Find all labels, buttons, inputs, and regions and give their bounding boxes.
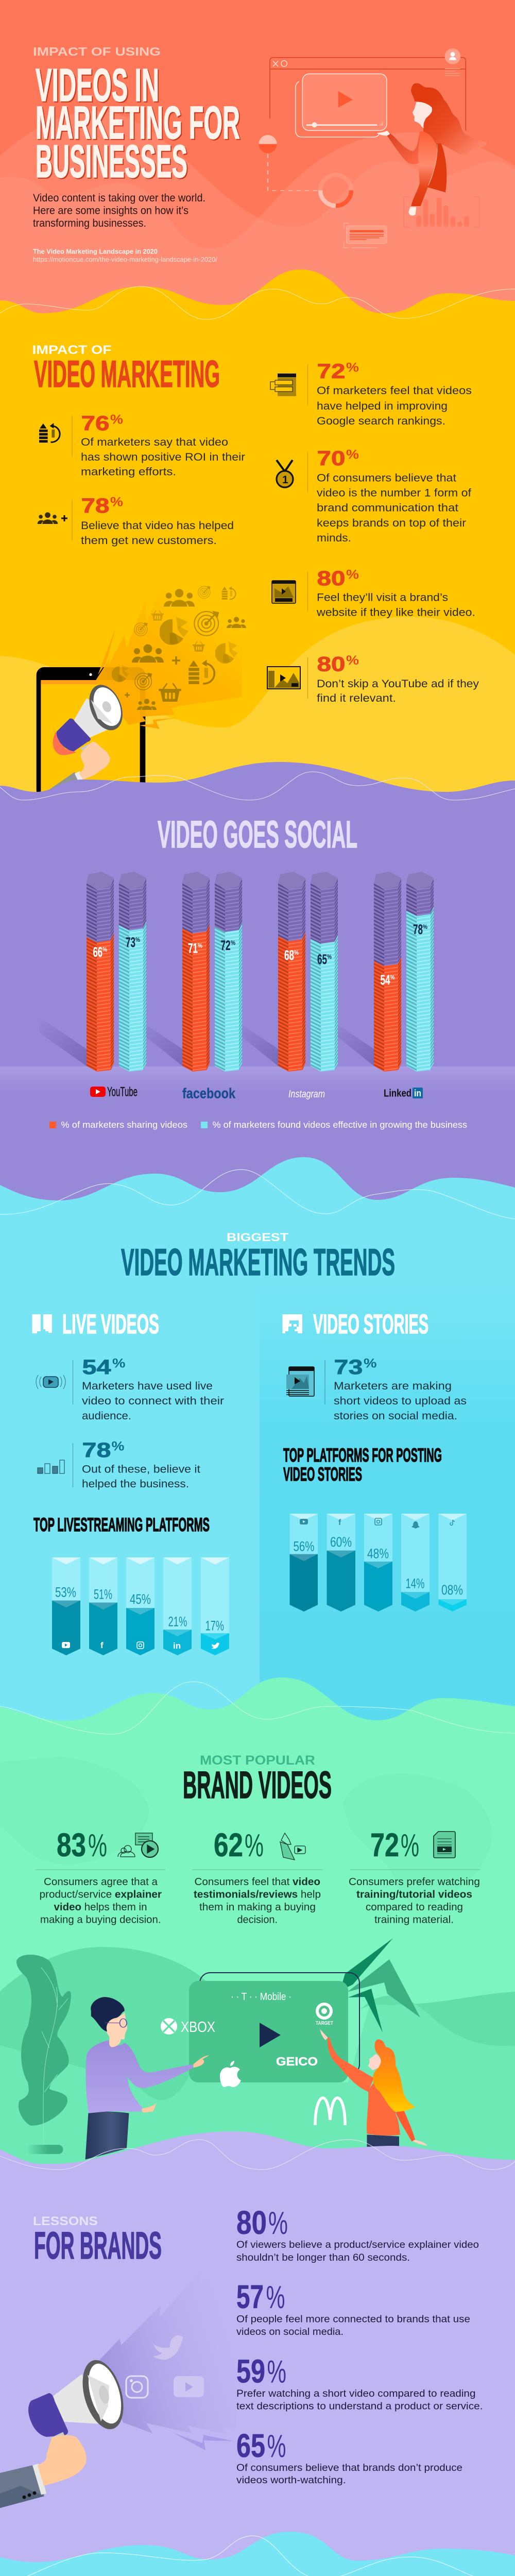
stat: 62% testimonials: testimonials/reviews help (194, 1889, 321, 1900)
bar: Facebook sharing 71%: % (198, 942, 202, 949)
stat: 70%: minds. (317, 532, 351, 544)
stat: 72% tutorials: training/tutorial videos (356, 1889, 472, 1900)
icon: testimonial book (280, 1833, 305, 1860)
bar: Facebook 60%: f (338, 1518, 341, 1527)
bar: LinkedIn effective 78%: 78 (413, 922, 423, 937)
stat: 70%: Of consumers believe that (317, 472, 456, 484)
lightning bolt (174, 2433, 233, 2450)
title: BUSINESSES (37, 137, 188, 189)
stat: 80% visit website: Feel they’ll visit a brand’s (317, 591, 448, 604)
yellow wave background (0, 269, 515, 824)
bar: LinkedIn 21%: 21% (168, 1614, 187, 1629)
chart heading: top livestreaming platforms: TOP LIVESTREAMING PLATFORMS (33, 1514, 210, 1535)
stat: 78%: 78 (82, 1439, 111, 1462)
bar: YouTube sharing 66%: % (102, 946, 107, 953)
heading: FOR BRANDS (34, 2224, 162, 2267)
stat: 83% explainer: product/service explainer (39, 1889, 162, 1900)
panel: impact of video marketing (0, 269, 515, 824)
legend: % of marketers sharing videos (61, 1120, 187, 1130)
stat: 73%: 73 (334, 1356, 363, 1379)
logo: Target (316, 2004, 333, 2026)
text document card (344, 223, 387, 248)
video player card (296, 74, 387, 137)
stat: 57% (236, 2278, 470, 2337)
bar: Instagram sharing 68%: 68 (284, 947, 294, 963)
stat: 62% testimonials: decision. (237, 1914, 278, 1926)
stat: 76%: % (110, 412, 123, 427)
bar: YouTube 56% (289, 1514, 318, 1612)
icon: number one medal (277, 460, 293, 487)
bar: Instagram 48% (364, 1514, 392, 1612)
stat: 78%: 78 (81, 495, 109, 517)
bar: YouTube effective 73%: 73 (126, 935, 135, 950)
title: VIDEOS IN (37, 61, 160, 112)
stat: 80% visit website: 80 (317, 567, 345, 590)
logo: Xbox: XBOX (181, 2019, 215, 2036)
icon: instagram (126, 2376, 148, 2398)
title (36, 60, 241, 189)
bar: Instagram sharing 68% (278, 872, 305, 1072)
legend: % of marketers found videos effective in growing the business (212, 1120, 467, 1130)
stat: 73%: % (364, 1356, 377, 1370)
stat: 73%: stories on social media. (334, 1410, 457, 1422)
bar: YouTube sharing 66% (87, 872, 114, 1072)
stat: 72% tutorials: 72 (370, 1826, 399, 1863)
bar: YouTube 56%: 56% (294, 1538, 314, 1554)
stat: 78%: Believe that video has helped (81, 519, 234, 532)
stat: 80% visit website (272, 567, 475, 618)
bar: Instagram effective 65% (311, 872, 338, 1072)
heading (32, 343, 220, 395)
logo: YouTube: YouTube (107, 1085, 138, 1099)
column: video stories (282, 1309, 467, 1612)
stat: 76%: Of marketers say that video (81, 436, 228, 448)
stat: 72%: Google search rankings. (317, 415, 445, 427)
stat: 72% tutorials: % (401, 1828, 419, 1863)
bar: YouTube effective 73% (119, 872, 146, 1072)
green wave background (0, 1677, 515, 2190)
bar: Facebook 60% (327, 1514, 355, 1612)
icon: tutorial document (434, 1832, 455, 1858)
logo: Apple (220, 2061, 241, 2087)
stat: 65% (236, 2427, 462, 2486)
intro paragraph: transforming businesses. (33, 217, 146, 229)
stat: 57%: 57 (236, 2278, 264, 2315)
logo: Geico: GEICO (276, 2055, 318, 2068)
floor band (0, 1066, 515, 1092)
stat: 80% visit website: website if they like their video. (316, 606, 475, 618)
stat: 54%: % (112, 1356, 126, 1370)
icon: dollar return (39, 423, 60, 443)
lightning bolts (98, 626, 178, 729)
donut chart (320, 175, 351, 206)
logo: Instagram: Instagram (288, 1089, 325, 1100)
heading: BRAND VIDEOS (183, 1764, 332, 1806)
stat: 70%: keeps brands on top of their (317, 517, 466, 529)
subheading: live videos (32, 1309, 159, 1340)
lilac wave background (0, 2131, 515, 2576)
megaphone and hand (46, 680, 129, 792)
stat: 70%: video is the number 1 form of (317, 486, 471, 499)
stat: 59%: text descriptions to understand a product or service. (236, 2401, 483, 2412)
plant (16, 1955, 71, 2154)
stat: 72% tutorials: Consumers prefer watching (349, 1876, 480, 1888)
icon: story window (286, 1367, 314, 1396)
megaphone and hand (0, 2355, 131, 2508)
chart: top livestreaming platforms (52, 1557, 229, 1655)
source reference: https://motioncue.com/the-video-marketing-landscape-in-2020/ (33, 256, 217, 263)
stat: 78%: % (111, 1439, 125, 1454)
hero background (0, 0, 515, 330)
bar: Facebook effective 72%: 72 (220, 938, 231, 953)
stat: 59% (236, 2352, 483, 2412)
chart: top platforms for video stories (289, 1514, 467, 1612)
stat: 78%: helped the business. (82, 1478, 189, 1490)
intro paragraph: Video content is taking over the world. (33, 192, 205, 204)
logo: facebook: facebook (182, 1085, 235, 1101)
bar: Instagram 45%: 45% (130, 1591, 151, 1607)
panel: future outlook background (0, 2532, 515, 2576)
icon: skip ad video (267, 667, 300, 689)
stat: 76%: has shown positive ROI in their (81, 451, 245, 463)
hero illustration (259, 48, 487, 248)
stat: 76% (39, 412, 245, 478)
stat: 57%: % (266, 2280, 285, 2315)
bar: Snapchat 14% (401, 1514, 430, 1612)
bar: TikTok 08% (439, 1514, 467, 1612)
bar: Facebook 51% (89, 1557, 117, 1655)
stat: 65%: % (267, 2429, 286, 2464)
stat: 78% (38, 1439, 200, 1490)
bar: Snapchat 14%: 14% (406, 1575, 424, 1591)
stat: 57%: Of people feel more connected to brands that use (236, 2313, 470, 2325)
stat: 65%: 65 (236, 2427, 265, 2464)
intro paragraph: Here are some insights on how it’s (33, 205, 188, 216)
bar: LinkedIn sharing 54%: % (390, 974, 395, 981)
stat: 80% youtube ad (267, 653, 479, 704)
intro paragraph (33, 192, 205, 229)
stat: 80% youtube ad: % (346, 653, 359, 668)
bar: Instagram 48%: 48% (367, 1546, 389, 1561)
stat: 80% visit website: % (346, 568, 359, 582)
bar chart (404, 197, 479, 227)
stat: 62% testimonials: 62 (214, 1826, 243, 1863)
tablet with megaphone (37, 564, 246, 799)
stat: 73% (286, 1356, 467, 1422)
stat: 72%: Of marketers feel that videos (317, 384, 472, 397)
bar: Twitter 17%: 17% (205, 1618, 224, 1633)
bar: LinkedIn sharing 54% (374, 872, 401, 1072)
icon: visit website (272, 581, 296, 603)
stat: 78%: them get new customers. (81, 534, 217, 547)
bar: LinkedIn effective 78% (406, 872, 434, 1072)
stat: 62% testimonials: % (245, 1828, 264, 1863)
bar: Instagram 45% (126, 1557, 154, 1655)
panel: biggest video marketing trends (0, 1157, 515, 1752)
heading (121, 1231, 395, 1283)
heading (33, 2214, 162, 2267)
leaves behind card (340, 1938, 420, 2032)
sound beam (98, 2248, 236, 2434)
stat: 80%: 80 (236, 2204, 267, 2241)
bar: Facebook 51%: 51% (94, 1587, 112, 1602)
bar shadows (38, 1016, 374, 1066)
stat: 83% explainer: 83 (57, 1826, 86, 1863)
stat: 72% tutorials: training material. (374, 1914, 454, 1926)
stat: 59%: Prefer watching a short video compared to reading (236, 2388, 476, 2399)
stat: 78%: Out of these, believe it (82, 1463, 200, 1476)
stat: 72%: have helped in improving (317, 400, 448, 412)
stat: 72%: 72 (317, 360, 345, 383)
panel: hero (0, 0, 515, 330)
bar: YouTube 53%: 53% (55, 1585, 76, 1600)
bar: TikTok 08%: 08% (441, 1582, 463, 1598)
bar: Twitter 17% (201, 1557, 229, 1655)
bar: Facebook sharing 71% (182, 872, 210, 1072)
stat: 72% tutorials: compared to reading (366, 1902, 463, 1913)
stat: 54%: Marketers have used live (82, 1380, 213, 1392)
stat: 83% explainer: % (88, 1828, 107, 1863)
panel: most popular brand videos (0, 1677, 515, 2190)
stat: 70%: % (346, 447, 359, 462)
logo: Xbox (161, 2018, 215, 2036)
title: MARKETING FOR (36, 97, 240, 149)
logo: T-Mobile: · · T · · Mobile · (231, 1991, 291, 2003)
title: MARKETING FOR (37, 98, 241, 150)
bar: Instagram sharing 68%: % (294, 949, 299, 956)
bar: LinkedIn sharing 54%: 54 (380, 972, 390, 988)
bar: Facebook effective 72%: % (231, 939, 235, 946)
browser window (270, 48, 466, 130)
heading: VIDEO MARKETING (34, 353, 220, 395)
stat: 80%: shouldn’t be longer than 60 seconds. (236, 2252, 410, 2263)
logo: LinkedIn: in (414, 1088, 421, 1098)
stat: 73%: short videos to upload as (334, 1395, 467, 1407)
source reference: The Video Marketing Landscape in 2020 (33, 247, 158, 256)
outlined screen (200, 1973, 359, 2075)
stat: 83% explainer: Consumers agree that a (44, 1876, 158, 1888)
stat: 72% (270, 360, 472, 427)
sound burst (95, 564, 242, 725)
legend (49, 1120, 467, 1130)
stat: 54% (36, 1356, 224, 1422)
half-filled dot with dashed connector (259, 135, 318, 191)
stat: 80% (236, 2204, 479, 2263)
source reference (33, 247, 217, 263)
stat: 65%: videos worth-watching. (236, 2475, 346, 2486)
bar: Instagram effective 65%: % (327, 953, 332, 960)
stat: 76%: marketing efforts. (81, 466, 176, 478)
stat: 80% youtube ad: find it relevant. (317, 692, 396, 704)
stat: 72% tutorials (349, 1826, 480, 1926)
cyan wave background (0, 1157, 515, 1752)
bar: YouTube 53% (52, 1557, 80, 1655)
bar: YouTube effective 73%: % (135, 936, 140, 943)
stat: 80%: Of viewers believe a product/service explainer video (236, 2239, 479, 2250)
stat: 72%: % (346, 361, 359, 375)
marketing icons in burst (112, 586, 246, 710)
stat: 78% (38, 495, 234, 547)
stat: 80%: % (268, 2206, 288, 2241)
stat: 83% explainer: video helps them in (54, 1902, 147, 1913)
column: live videos (32, 1309, 229, 1655)
bar: Facebook 60%: 60% (330, 1534, 352, 1550)
eyebrow: impact of using: IMPACT OF USING (33, 45, 161, 58)
stat: 59%: 59 (236, 2352, 265, 2389)
logo: LinkedIn: Linked (384, 1088, 411, 1099)
woman reaching for logo (320, 2029, 428, 2150)
subheading: video stories (282, 1309, 428, 1340)
stat: 54%: video to connect with their (82, 1395, 224, 1407)
panel: lessons for brands (0, 2131, 515, 2576)
icon: youtube (174, 2376, 204, 2397)
woman reaching for video (377, 83, 487, 215)
stat: 76%: 76 (81, 412, 109, 435)
icon: twitter (153, 2335, 183, 2360)
purple wave background (0, 762, 515, 1211)
bar: LinkedIn effective 78%: % (423, 923, 427, 930)
icon: growth bars (38, 1460, 64, 1473)
play button (260, 2023, 281, 2047)
icon: explainer video (118, 1833, 158, 1857)
heading: IMPACT OF (32, 343, 111, 357)
stat: 54%: audience. (82, 1410, 131, 1422)
stat: 70%: brand communication that (317, 502, 458, 514)
logo: McDonald's (315, 2098, 345, 2125)
bar: LinkedIn 21% (163, 1557, 192, 1655)
heading: LESSONS (33, 2214, 98, 2228)
stat: 62% testimonials (192, 1826, 322, 1926)
stat: 83% explainer (35, 1826, 165, 1926)
title: BUSINESSES (36, 136, 187, 188)
stat: 62% testimonials: Consumers feel that video (195, 1876, 320, 1888)
heading: BIGGEST (227, 1231, 289, 1244)
title: VIDEOS IN (36, 60, 159, 111)
subheading: live videos: LIVE VIDEOS (62, 1309, 159, 1340)
icon: number one medal: 1 (282, 474, 288, 486)
brand logos (161, 1991, 345, 2125)
icon: search rankings (270, 374, 296, 396)
man pointing at card (85, 1997, 210, 2160)
tablet (37, 667, 145, 799)
stat: 80% youtube ad: 80 (317, 653, 345, 676)
bar: Instagram effective 65%: 65 (317, 952, 327, 967)
social icons in beam (126, 2335, 204, 2398)
icon: new customers (38, 512, 67, 524)
brand video card (189, 1981, 348, 2082)
stat: 65%: Of consumers believe that brands don’t produce (236, 2462, 462, 2473)
stat: 73%: Marketers are making (334, 1380, 452, 1392)
stat: 54%: 54 (82, 1356, 111, 1379)
chart heading: top platforms for posting video stories (283, 1445, 442, 1485)
stat: 83% explainer: making a buying decision. (40, 1914, 161, 1926)
bar: YouTube sharing 66%: 66 (93, 944, 102, 960)
stat: 70%: 70 (317, 447, 345, 470)
panel: video goes social (0, 762, 515, 1211)
stat: 62% testimonials: them in making a buying (199, 1902, 316, 1913)
stat: 70% (277, 447, 471, 544)
heading (183, 1753, 332, 1806)
bar: Facebook effective 72% (215, 872, 242, 1072)
hills (0, 1947, 515, 2190)
chart heading: top platforms for posting video stories: VIDEO STORIES (283, 1464, 362, 1485)
stat: 59%: % (267, 2354, 286, 2389)
bar: Facebook sharing 71%: 71 (188, 941, 198, 956)
bar: LinkedIn 21%: in (173, 1641, 181, 1651)
stat: 57%: videos on social media. (236, 2326, 344, 2337)
icon: live stream (36, 1375, 65, 1389)
heading: MOST POPULAR (200, 1753, 315, 1768)
stat: 78%: % (110, 495, 123, 509)
bar: Facebook 51%: f (100, 1640, 104, 1650)
logo: Target: TARGET (316, 2021, 333, 2026)
logo: YouTube (90, 1085, 138, 1099)
stat: 80% youtube ad: Don’t skip a YouTube ad if they (317, 677, 479, 690)
